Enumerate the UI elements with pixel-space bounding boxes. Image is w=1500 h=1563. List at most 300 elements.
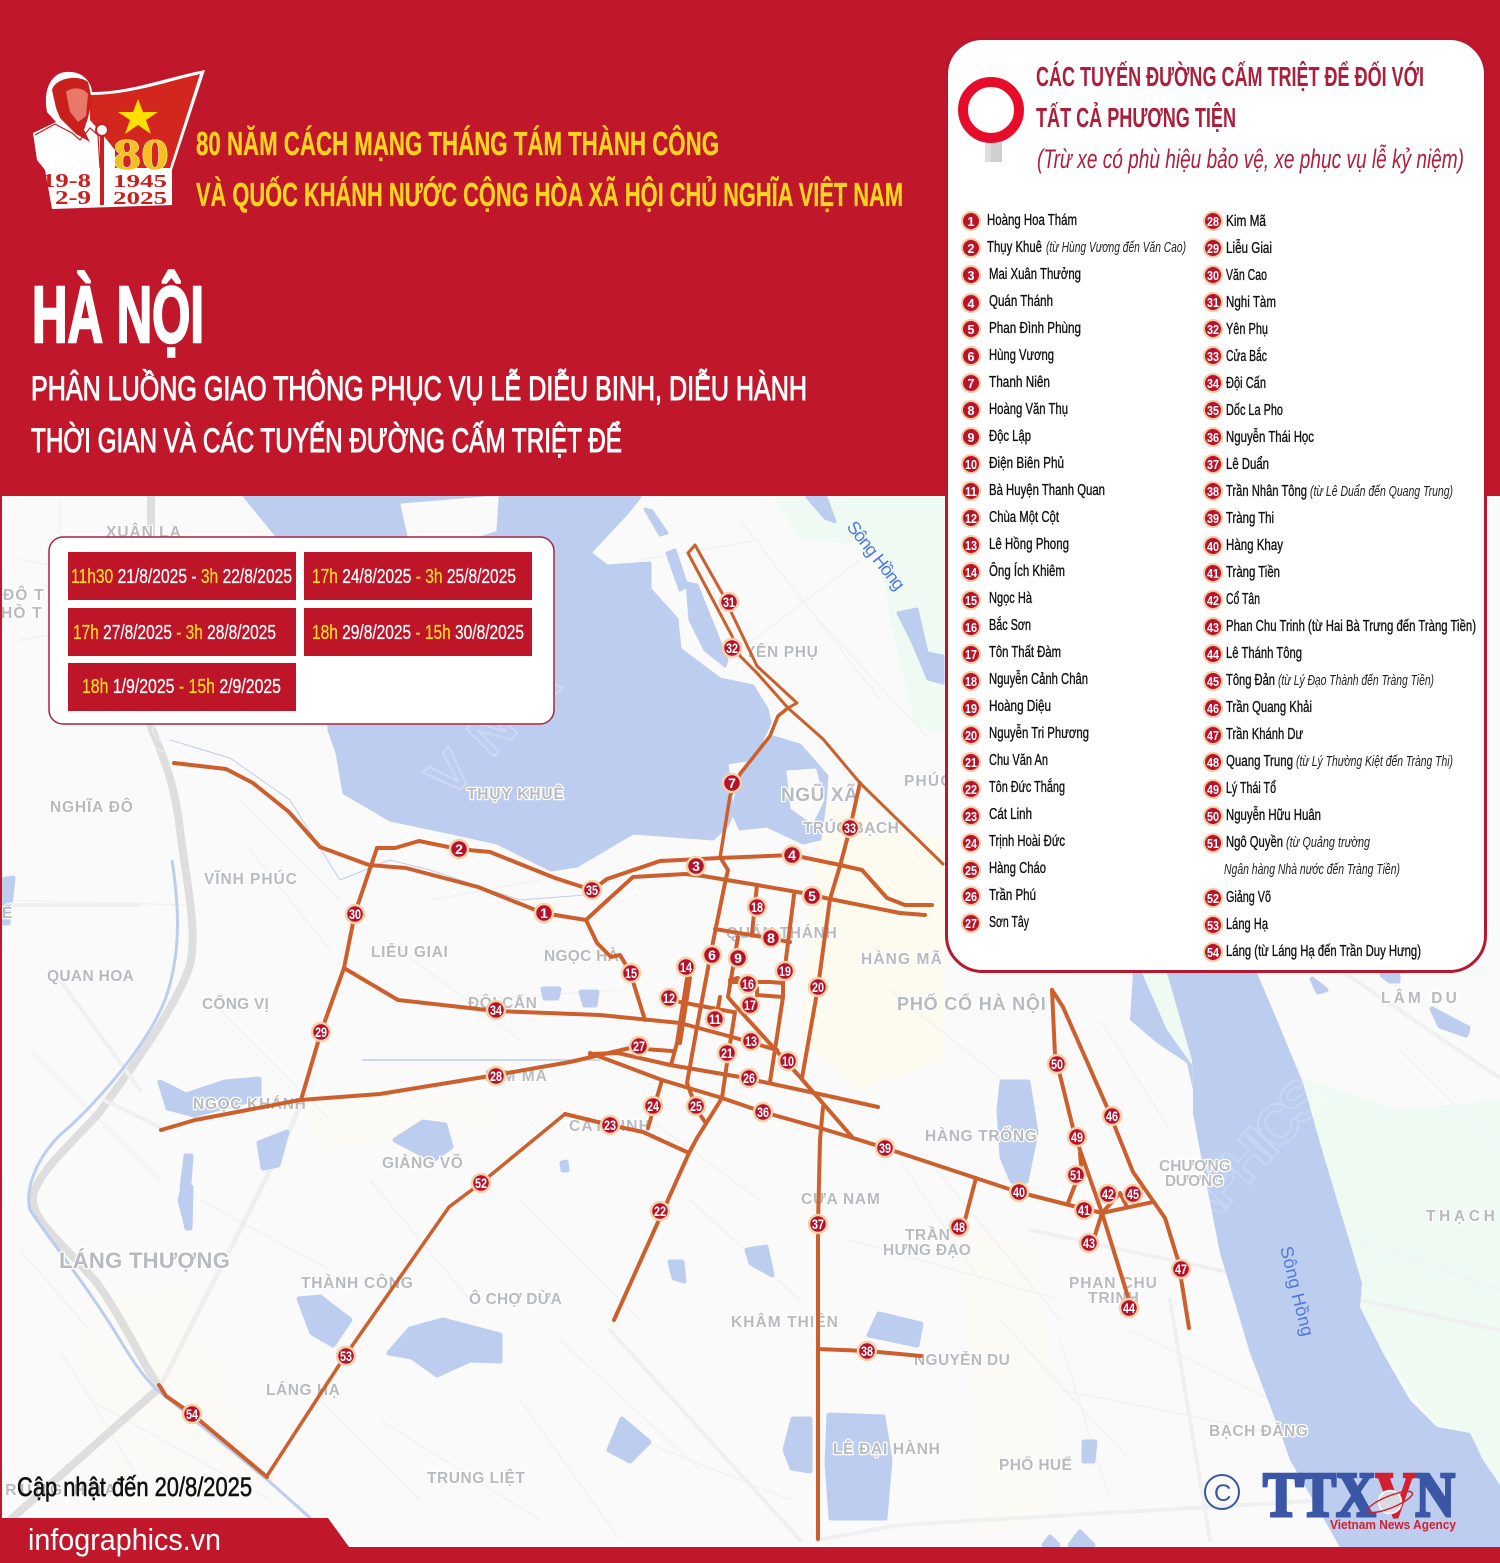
item 46: 46 — [1207, 702, 1219, 716]
map: place names: LÊ ĐẠI HÀNH — [833, 1440, 941, 1458]
item 40: Hàng Khay — [1226, 537, 1283, 554]
item 22: Tôn Đức Thắng — [989, 779, 1065, 796]
item 33: Cửa Bắc — [1226, 348, 1267, 365]
item 53 — [1204, 916, 1268, 934]
map: place names: CHƯƠNG — [1159, 1158, 1232, 1175]
item 23 — [962, 806, 1032, 825]
item 11: Bà Huyện Thanh Quan — [989, 482, 1105, 499]
map: place names: XUÂN LA — [106, 523, 182, 541]
map: small lakes — [1, 878, 1468, 1545]
item 44 — [1204, 645, 1302, 663]
item 39 — [1204, 509, 1274, 527]
map: place names: TRUNG LIỆT — [427, 1469, 526, 1487]
item 54: 54 — [1207, 946, 1219, 960]
route: Tran Quang Khai — [1052, 990, 1189, 1328]
map: place names: CÁT LINH — [569, 1118, 651, 1135]
marker 26: 26 — [743, 1070, 755, 1086]
map: place names: CỐNG VỊ — [202, 995, 270, 1013]
marker 40: 40 — [1013, 1184, 1025, 1200]
route: Nguyen Thai Hoc to Trang Tien — [590, 1053, 1153, 1213]
item 32: Yên Phụ — [1226, 321, 1268, 338]
time window 2 — [304, 552, 532, 600]
marker 53: 53 — [340, 1348, 352, 1364]
map: place names: HỒ T — [1, 604, 43, 622]
map: place names: TRINH — [1088, 1290, 1140, 1307]
item 11: 11 — [965, 485, 977, 499]
item 45 — [1204, 672, 1434, 690]
marker 30: 30 — [349, 906, 361, 922]
copyright symbol: C — [1214, 1480, 1231, 1507]
map: place names: PHỐ CỔ HÀ NỘI — [897, 993, 1047, 1014]
item 26 — [962, 887, 1036, 905]
update date: Cập nhật đến 20/8/2025 — [17, 1472, 252, 1502]
marker 14: 14 — [680, 959, 692, 975]
route: Giang Vo and Lang Ha — [267, 1114, 565, 1476]
marker 3 — [687, 857, 705, 875]
map: place names: KHÂM THIÊN — [731, 1313, 839, 1331]
item 42 — [1204, 591, 1260, 609]
map: place names: Ô CHỢ DỪA — [469, 1290, 563, 1308]
legend column 2 — [1204, 212, 1476, 961]
item 29: Liễu Giai — [1226, 240, 1272, 257]
item 51 — [1204, 834, 1400, 878]
marker 8: 8 — [767, 930, 775, 946]
route: Le Duan — [818, 1107, 823, 1539]
item 14 — [962, 563, 1065, 581]
marker 6: 6 — [708, 947, 716, 963]
item 35: 35 — [1207, 404, 1219, 418]
item 25: 25 — [965, 864, 977, 878]
item 47 — [1204, 726, 1303, 744]
watermarks — [128, 542, 1336, 1298]
item 51: (từ Quảng trường — [1286, 834, 1370, 851]
item 37: Lê Duẩn — [1226, 456, 1269, 473]
item 53: Láng Hạ — [1226, 916, 1268, 933]
item 35 — [1204, 401, 1283, 419]
item 14: Ông Ích Khiêm — [989, 563, 1065, 580]
item 19: 19 — [965, 702, 977, 716]
item 2: 2 — [968, 242, 975, 256]
anniversary heading — [196, 124, 903, 213]
time window 4: 18h 29/8/2025 - 15h 30/8/2025 — [312, 622, 524, 644]
item 28: 28 — [1207, 215, 1219, 229]
map: place names: ĐỘI CẤN — [468, 994, 538, 1012]
marker 15: 15 — [625, 965, 637, 981]
watermarks: GRAPHICS — [1113, 1065, 1336, 1298]
anniversary heading: VÀ QUỐC KHÁNH NƯỚC CỘNG HÒA XÃ HỘI CHỦ NGHĨA VIỆT NAM — [196, 175, 903, 213]
item 45: (từ Lý Đạo Thành đến Tràng Tiền) — [1278, 672, 1434, 689]
item 16 — [962, 617, 1031, 636]
map: place names: LÁNG HẠ — [266, 1382, 341, 1399]
item 26: 26 — [965, 890, 977, 904]
item 31: Nghi Tàm — [1226, 294, 1276, 311]
item 31 — [1204, 293, 1276, 311]
item 46 — [1204, 699, 1312, 717]
logo: TTXVN: Vietnam News Agency — [1330, 1517, 1457, 1532]
logo: 80 years emblem: 2025 — [113, 188, 167, 208]
route: Van Cao and Lieu Giai — [301, 848, 377, 1100]
item 24: 24 — [965, 837, 977, 851]
item 8: Hoàng Văn Thụ — [989, 401, 1068, 418]
item 1 — [962, 212, 1077, 230]
item 15: 15 — [965, 594, 977, 608]
marker 52: 52 — [475, 1175, 487, 1191]
time window 3 — [68, 608, 296, 656]
icon: no-vehicle sign — [963, 82, 1019, 162]
map: place names: NGHĨA ĐÔ — [50, 798, 134, 816]
map: place names: NGŨ XÃ — [781, 784, 859, 806]
item 50: Nguyễn Hữu Huân — [1226, 807, 1321, 824]
map: green river banks — [775, 497, 1500, 1490]
item 52: Giảng Võ — [1226, 889, 1271, 906]
marker 9 — [729, 949, 747, 967]
time window 3: 17h 27/8/2025 - 3h 28/8/2025 — [73, 622, 276, 644]
watermarks: GRAPHICS — [128, 542, 344, 768]
item 7: 7 — [968, 377, 975, 391]
item 25 — [962, 860, 1046, 879]
logo: TTXVN: TTXVN — [1263, 1459, 1455, 1530]
logo: 80 years emblem: 2-9 — [55, 187, 91, 209]
item 40: 40 — [1207, 540, 1219, 554]
marker 41: 41 — [1078, 1202, 1090, 1218]
marker 27: 27 — [633, 1038, 645, 1054]
item 19 — [962, 698, 1051, 717]
item 7: Thanh Niên — [989, 374, 1050, 391]
map: place names: KIM MÃ — [485, 1067, 548, 1085]
route: Phan Dinh Phung — [586, 874, 925, 920]
marker 21: 21 — [721, 1045, 733, 1061]
marker 9: 9 — [734, 950, 742, 966]
footer bar — [0, 1518, 1500, 1563]
marker 42: 42 — [1102, 1186, 1114, 1202]
map: place names: THẠCH — [1426, 1208, 1496, 1225]
route: Thuy Khue — [377, 841, 592, 890]
map: place names: GIẢNG VÕ — [382, 1154, 464, 1172]
route: Lang — [159, 1385, 267, 1477]
route: Hung Vuong — [687, 857, 728, 1122]
item 51: Ngô Quyền — [1226, 834, 1283, 851]
item 1: 1 — [968, 215, 975, 229]
panel: time windows — [49, 537, 554, 724]
legend column 1 — [962, 212, 1186, 932]
item 1: Hoàng Hoa Thám — [987, 212, 1077, 229]
item 4 — [962, 293, 1053, 312]
item 17: 17 — [965, 648, 977, 662]
map: place names: LIỄU GIAI — [371, 944, 449, 961]
item 10: Điện Biên Phủ — [989, 455, 1064, 472]
item 52: 52 — [1207, 892, 1219, 906]
marker 11: 11 — [709, 1011, 721, 1027]
item 34: 34 — [1207, 377, 1219, 391]
item 12: Chùa Một Cột — [989, 509, 1059, 526]
marker 32: 32 — [726, 640, 738, 656]
map: place names: HÀNG MÃ — [861, 950, 943, 968]
item 35: Dốc La Pho — [1226, 402, 1283, 419]
item 21: 21 — [965, 756, 977, 770]
item 13: 13 — [965, 539, 977, 553]
marker 4 — [783, 846, 801, 864]
item 16: Bắc Sơn — [989, 617, 1031, 634]
item 2: (từ Hùng Vương đến Văn Cao) — [1046, 239, 1186, 256]
item 32 — [1204, 320, 1268, 338]
marker 51: 51 — [1070, 1167, 1082, 1183]
map: place names: DƯƠNG — [1165, 1173, 1225, 1190]
item 31: 31 — [1207, 296, 1219, 310]
marker 7 — [723, 774, 741, 792]
map: river labels: Sông Hồng — [1276, 1244, 1318, 1338]
marker 43: 43 — [1083, 1235, 1095, 1251]
map: place names: PHỐ HUẾ — [999, 1456, 1073, 1474]
map: place names: PHÚC — [904, 772, 953, 790]
route: Nghi Tam and Yen Phu loop — [688, 545, 943, 864]
map: place names: QUAN HOA — [47, 968, 135, 985]
item 24: Trịnh Hoài Đức — [989, 833, 1065, 850]
route: Mai Xuan Thuong and Quan Thanh — [592, 855, 932, 905]
item 36 — [1204, 428, 1314, 446]
marker 6 — [703, 946, 721, 964]
item 30 — [1204, 266, 1267, 284]
marker 1 — [535, 904, 553, 922]
marker 29: 29 — [315, 1024, 327, 1040]
marker 24: 24 — [647, 1098, 659, 1114]
item 34: Đội Cấn — [1226, 375, 1266, 392]
item 11 — [962, 482, 1105, 500]
item 8: 8 — [968, 404, 975, 418]
copyright symbol — [1205, 1475, 1239, 1509]
item 49: Lý Thái Tổ — [1226, 780, 1276, 797]
item 39: 39 — [1207, 512, 1219, 526]
item 15: Ngọc Hà — [989, 590, 1032, 607]
route: Quang Trung — [959, 1178, 976, 1227]
item 4: Quán Thánh — [989, 293, 1053, 310]
item 8 — [962, 401, 1068, 419]
route number markers — [183, 593, 1190, 1423]
route: Kim Ma and Nguyen Thai Hoc — [161, 1048, 672, 1130]
item 12 — [962, 509, 1059, 527]
marker 25: 25 — [690, 1098, 702, 1114]
item 20: 20 — [965, 729, 977, 743]
marker 45: 45 — [1127, 1186, 1139, 1202]
item 15 — [962, 590, 1032, 609]
map: place names: THỤY KHUÊ — [467, 785, 565, 803]
item 20: Nguyễn Tri Phương — [989, 725, 1089, 742]
item 20 — [962, 725, 1089, 744]
marker 22: 22 — [654, 1203, 666, 1219]
map: place names: QUÁN THÁNH — [726, 925, 838, 942]
item 5: Phan Đình Phùng — [989, 320, 1081, 337]
item 17 — [962, 644, 1061, 663]
map: place names — [0, 523, 1496, 1499]
map: place names: BẠCH ĐẰNG — [1209, 1422, 1309, 1440]
marker 5 — [803, 887, 821, 905]
map: place names: TRÚC BẠCH — [803, 819, 900, 837]
item 28 — [1204, 212, 1266, 230]
marker 48: 48 — [953, 1219, 965, 1235]
item 30: Văn Cao — [1226, 267, 1267, 284]
marker 3: 3 — [692, 858, 700, 874]
map: river labels: Sông Hồng — [843, 517, 909, 594]
item 18: Nguyễn Cảnh Chân — [989, 671, 1088, 688]
item 37: 37 — [1207, 458, 1219, 472]
map: warm old-quarter tint — [70, 800, 1060, 1540]
map background — [0, 496, 1500, 1556]
item 27: Sơn Tây — [989, 914, 1029, 931]
item 2: Thụy Khuê — [987, 239, 1042, 256]
route: Tran Nhan Tong — [818, 1349, 921, 1356]
item 45: 45 — [1207, 675, 1219, 689]
panel heading — [1036, 60, 1424, 133]
panel heading: TẤT CẢ PHƯƠNG TIỆN — [1036, 101, 1236, 133]
item 22: 22 — [965, 783, 977, 797]
item 4: 4 — [968, 297, 975, 311]
route: Hoang Hoa Tham and Ngoc Ha — [174, 763, 645, 1020]
item 39: Tràng Thi — [1226, 510, 1274, 527]
route: Cua Bac and Dien Bien Phu — [802, 783, 860, 1078]
item 27 — [962, 914, 1029, 932]
marker 34: 34 — [490, 1002, 502, 1018]
item 54 — [1204, 943, 1421, 961]
marker 20: 20 — [812, 979, 824, 995]
marker 19: 19 — [779, 963, 791, 979]
item 6 — [962, 347, 1054, 365]
item 6: Hùng Vương — [989, 347, 1054, 364]
item 32: 32 — [1207, 323, 1219, 337]
map: place names: NGUYỄN DU — [914, 1352, 1011, 1369]
map: place names: CỬA NAM — [801, 1190, 881, 1208]
item 42: 42 — [1207, 594, 1219, 608]
marker 2: 2 — [455, 841, 463, 857]
marker 13: 13 — [745, 1033, 757, 1049]
map: Red River — [1130, 973, 1500, 1556]
item 9 — [962, 428, 1031, 446]
map: place names: NGỌC KHÁNH — [193, 1096, 307, 1113]
map: place names: HƯNG ĐẠO — [883, 1242, 972, 1259]
item 18 — [962, 671, 1088, 690]
item 24 — [962, 833, 1065, 852]
marker 12: 12 — [663, 990, 675, 1006]
item 49 — [1204, 780, 1276, 798]
item 23: 23 — [965, 810, 977, 824]
item 18: 18 — [965, 675, 977, 689]
item 37 — [1204, 455, 1269, 473]
item 48 — [1204, 753, 1453, 771]
item 2 — [962, 239, 1186, 257]
item 41: Tràng Tiền — [1226, 564, 1280, 581]
item 34 — [1204, 374, 1266, 392]
item 29 — [1204, 239, 1272, 257]
logo: 80 years emblem — [33, 70, 205, 209]
subtitle: PHÂN LUỒNG GIAO THÔNG PHỤC VỤ LỄ DIỄU BINH, DIỄU HÀNH — [31, 370, 807, 408]
item 51: Ngân hàng Nhà nước đến Tràng Tiền) — [1224, 861, 1400, 878]
item 49: 49 — [1207, 783, 1219, 797]
item 13 — [962, 536, 1069, 554]
item 16: 16 — [965, 621, 977, 635]
marker 10: 10 — [782, 1053, 794, 1069]
item 14: 14 — [965, 566, 977, 580]
time window 1: 11h30 21/8/2025 - 3h 22/8/2025 — [71, 566, 292, 588]
panel: banned streets — [946, 38, 1486, 972]
item 44: 44 — [1207, 648, 1219, 662]
map: river labels — [843, 517, 1318, 1338]
item 47: 47 — [1207, 729, 1219, 743]
item 41: 41 — [1207, 567, 1219, 581]
marker 2 — [450, 840, 468, 858]
time window 2: 17h 24/8/2025 - 3h 25/8/2025 — [312, 566, 516, 588]
logo: 80 years emblem: 1945 — [113, 171, 167, 191]
item 48: 48 — [1207, 756, 1219, 770]
marker 37: 37 — [812, 1216, 824, 1232]
item 38: 38 — [1207, 485, 1219, 499]
marker 33: 33 — [844, 820, 856, 836]
item 33 — [1204, 347, 1267, 365]
route: Ton Duc Thang branches — [565, 1080, 722, 1320]
map: place names: Ế — [2, 905, 14, 922]
item 10: 10 — [965, 458, 977, 472]
map: place names: ĐÔ T — [3, 586, 45, 604]
item 7 — [962, 374, 1050, 392]
item 27: 27 — [965, 917, 977, 931]
anniversary heading: 80 NĂM CÁCH MẠNG THÁNG TÁM THÀNH CÔNG — [196, 124, 719, 162]
marker 50: 50 — [1051, 1056, 1063, 1072]
watermarks: VNA — [414, 651, 572, 808]
marker 28: 28 — [490, 1068, 502, 1084]
marker 31: 31 — [723, 594, 735, 610]
subtitle — [31, 370, 807, 460]
item 41 — [1204, 564, 1280, 582]
marker 35: 35 — [586, 882, 598, 898]
map: place names: THÀNH CÔNG — [301, 1274, 414, 1292]
map: place names: PHAN CHU — [1069, 1275, 1158, 1292]
item 48: Quang Trung — [1226, 753, 1293, 770]
item 52 — [1204, 889, 1271, 907]
marker 36: 36 — [757, 1104, 769, 1120]
item 53: 53 — [1207, 919, 1219, 933]
marker 54: 54 — [186, 1406, 198, 1422]
subtitle: THỜI GIAN VÀ CÁC TUYẾN ĐƯỜNG CẤM TRIỆT ĐỂ — [31, 422, 622, 460]
marker 39: 39 — [879, 1140, 891, 1156]
logo: 80 years emblem: 80 — [113, 130, 169, 179]
item 40 — [1204, 537, 1283, 555]
title: Ha Noi: HÀ NỘI — [32, 270, 204, 359]
item 38: Trần Nhân Tông — [1226, 483, 1307, 500]
time window 1 — [68, 552, 296, 600]
item 21 — [962, 752, 1048, 771]
item 3: 3 — [968, 269, 975, 283]
item 3 — [962, 266, 1081, 284]
item 42: Cổ Tân — [1226, 591, 1260, 608]
marker 23: 23 — [604, 1117, 616, 1133]
map: place names: YÊN PHỤ — [745, 643, 819, 661]
route: Doi Can and Le Hong Phong — [344, 968, 777, 1050]
item 45: Tông Đản — [1226, 672, 1275, 689]
item 50: 50 — [1207, 810, 1219, 824]
item 19: Hoàng Diệu — [989, 698, 1051, 715]
route: central street grid — [671, 885, 853, 1138]
item 29: 29 — [1207, 242, 1219, 256]
item 51: 51 — [1207, 837, 1219, 851]
item 44: Lê Thánh Tông — [1226, 645, 1302, 662]
marker 38: 38 — [861, 1343, 873, 1359]
item 9: 9 — [968, 431, 975, 445]
item 21: Chu Văn An — [989, 752, 1048, 769]
item 9: Độc Lập — [989, 428, 1031, 445]
item 28: Kim Mã — [1226, 213, 1266, 230]
route: Ngo Quyen — [1068, 1153, 1081, 1203]
marker 18: 18 — [751, 899, 763, 915]
item 22 — [962, 779, 1065, 798]
marker 17: 17 — [744, 997, 756, 1013]
item 5 — [962, 320, 1081, 338]
